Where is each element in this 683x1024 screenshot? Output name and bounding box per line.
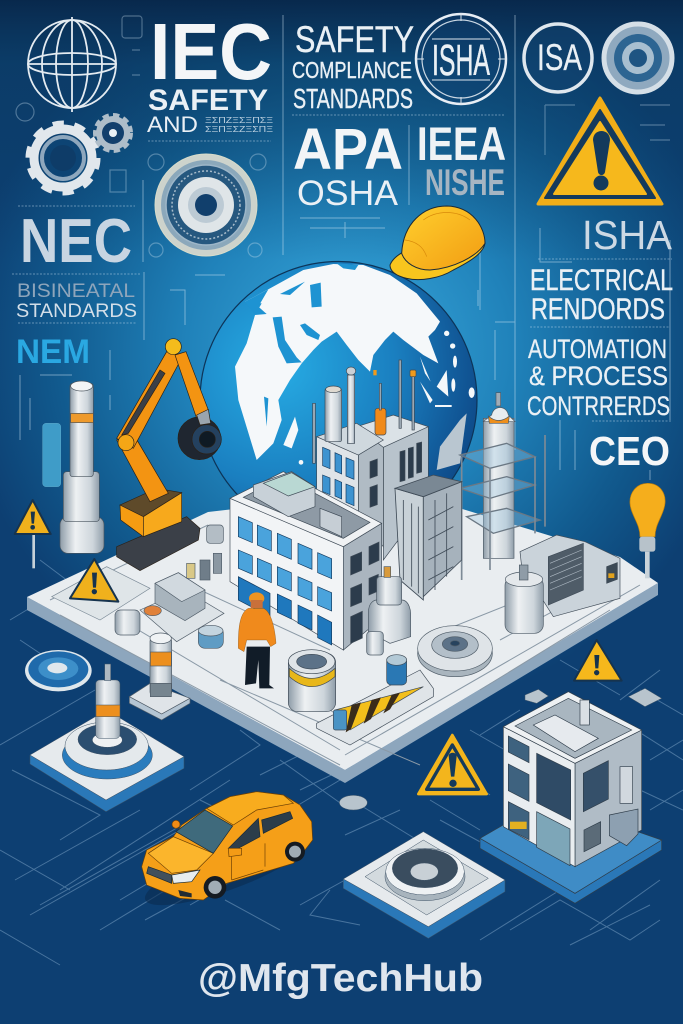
badge: ISA: ISA (537, 37, 582, 78)
right column labels: & PROCESS (529, 361, 668, 391)
excavator (117, 339, 221, 571)
right column labels: ISHA (582, 212, 673, 258)
blue cylinder (43, 423, 61, 487)
heading: APA OSHA (293, 117, 403, 213)
excavator cab (120, 488, 182, 537)
heading: safety compliance standards: STANDARDS (293, 83, 413, 114)
warning sign on post (15, 500, 51, 568)
panel: factory platform (27, 490, 658, 783)
excavator tracks (117, 517, 200, 571)
label: standards: STANDARDS (16, 301, 137, 322)
worker (238, 592, 276, 688)
light bulb (630, 483, 665, 578)
lower left group (25, 633, 315, 918)
heading: IEC: IEC (150, 7, 272, 96)
heading: SAFETY AND: ΣΞΠΞΣΖΞΣΠΞ (205, 125, 273, 134)
icon: hard hat (390, 206, 485, 280)
warning sign centre (418, 735, 487, 794)
badge: ISHA (416, 13, 506, 105)
right column labels (527, 212, 673, 474)
upper factory block (317, 415, 428, 560)
tray and platform warning (52, 559, 150, 620)
tall pillar (60, 381, 104, 553)
heading: SAFETY AND: ΞΣΠΖΞΣΞΠΣΞ (205, 116, 273, 125)
heading: APA OSHA: APA (293, 117, 403, 182)
icon: globe emblem (28, 17, 116, 112)
heading: IEEA NISHE: NISHE (425, 162, 505, 203)
label: standards: BISINEATAL (17, 281, 135, 302)
left plant equipment (15, 381, 224, 648)
icon: large warning triangle (538, 98, 662, 204)
left disc (25, 650, 92, 691)
small pillar on plinth (129, 633, 190, 720)
badge: round seal (604, 24, 672, 92)
excavator boom (117, 339, 208, 502)
control cabinet (140, 573, 224, 642)
label: NEM: NEM (16, 333, 90, 371)
heading: IEEA NISHE: IEEA (417, 117, 506, 170)
heading: SAFETY AND (147, 84, 273, 137)
storage tank (505, 565, 543, 633)
pedestal with valve (30, 664, 184, 812)
base disc (343, 832, 505, 938)
reactor vessel (367, 567, 411, 655)
badge: ISHA: ISHA (432, 36, 490, 85)
top shade (0, 0, 683, 260)
car (138, 792, 315, 918)
round floor plate (418, 626, 492, 677)
central plant (230, 360, 665, 745)
small parts beyond the platform (339, 688, 662, 810)
heading: APA OSHA: OSHA (297, 174, 399, 213)
footer handle: @MfgTechHub (198, 957, 483, 1000)
heading: SAFETY AND: SAFETY (148, 84, 268, 117)
heading: safety compliance standards: SAFETY (295, 19, 414, 60)
globe (200, 262, 477, 538)
small equipment (115, 525, 223, 648)
icon: bearing disc (155, 154, 257, 256)
hazard stripe tray (317, 655, 433, 745)
small warning sign (574, 640, 622, 681)
icon: gears (29, 116, 130, 192)
heading: safety compliance standards: COMPLIANCE (292, 57, 412, 83)
rear process tower (460, 393, 545, 580)
heading: NEC: NEC (20, 207, 132, 276)
lower right group (339, 688, 662, 938)
drum with hazard band (288, 650, 336, 712)
chimneys and antennas (313, 360, 416, 463)
badge: ISA (524, 24, 592, 92)
isometric office building (480, 692, 662, 903)
excavator claw (178, 409, 221, 460)
label: standards (16, 281, 137, 322)
main building (230, 472, 382, 650)
heading: safety compliance standards (292, 19, 414, 114)
right column labels: CEO (589, 428, 670, 474)
scaffold frame (395, 475, 462, 600)
heading: IEEA NISHE (417, 117, 506, 203)
heading: SAFETY AND: AND (147, 112, 198, 137)
louvered machine (520, 535, 620, 617)
